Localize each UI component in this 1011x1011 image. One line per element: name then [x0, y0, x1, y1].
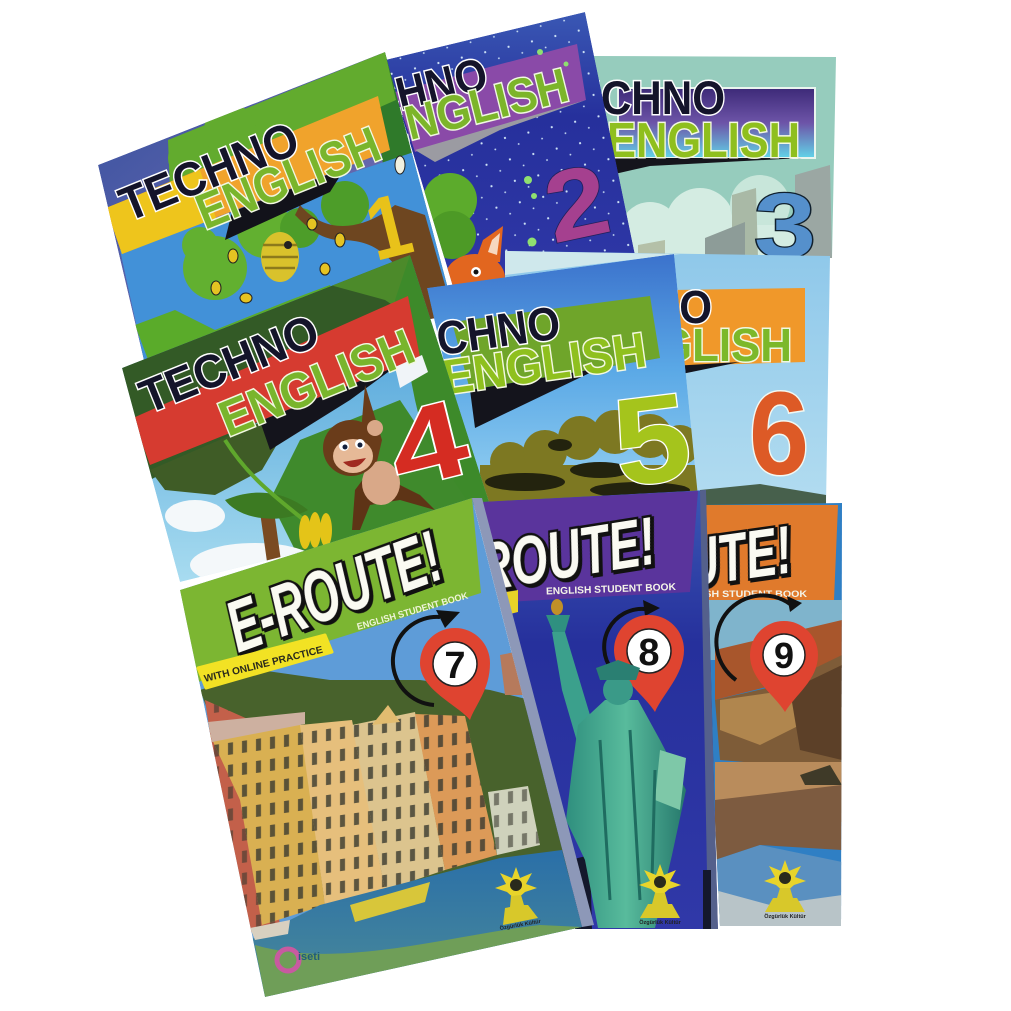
- subtitle: ENGLISH STUDENT BOOK: [356, 591, 469, 633]
- title band: [395, 44, 586, 152]
- right dark foliage and spine: [380, 52, 447, 285]
- book 4: Techno English 4: [122, 255, 490, 587]
- fox: [448, 226, 505, 284]
- title text: TECHNO: [112, 113, 306, 232]
- publisher logo: Özgürlük Kültür: [764, 913, 807, 920]
- title text: E-ROUTE!: [426, 503, 660, 613]
- city skyline: [570, 855, 592, 929]
- book 1: Techno English 1: ENGLISH: [188, 116, 388, 240]
- sky: [700, 600, 842, 660]
- book 6: Techno English 6: [505, 251, 830, 506]
- book 6: Techno English 6: ENGLISH: [597, 319, 792, 371]
- book 2: Techno English 2: [387, 12, 634, 284]
- title band: [705, 505, 838, 600]
- title text: TECHNO: [132, 304, 326, 423]
- coastal buildings: [205, 700, 540, 935]
- statue of liberty: [546, 599, 686, 928]
- route pin 9: [716, 595, 818, 712]
- banana tree: [225, 440, 310, 571]
- book 4: Techno English 4: ENGLISH: [211, 318, 422, 447]
- iseti logo: [277, 949, 320, 971]
- book 2: Techno English 2: ENGLISH: [372, 59, 574, 158]
- surf and sand: [715, 845, 842, 926]
- book 3: Techno English 3: [594, 56, 836, 258]
- title text: TECHNO: [310, 47, 492, 140]
- book 1: Techno English 1: [98, 52, 455, 365]
- spine: [472, 498, 594, 927]
- yellow pill edge: [505, 590, 518, 614]
- tree and trunk: [423, 173, 477, 259]
- title text: TECHNO: [380, 295, 563, 373]
- tree: [182, 181, 455, 320]
- number 2: 2: [535, 143, 619, 265]
- book 7: E-Route 7: [180, 498, 594, 997]
- lower-left foliage: [150, 423, 276, 495]
- number 4: 4: [376, 376, 479, 512]
- clouds and city: [620, 165, 832, 262]
- route pin 7: [393, 610, 490, 720]
- foliage: [168, 52, 396, 190]
- beehive: [261, 232, 299, 282]
- boats: [350, 882, 430, 922]
- title band: [106, 96, 390, 254]
- cliffs: [715, 655, 842, 790]
- subtitle: ENGLISH STUDENT BOOK: [672, 589, 807, 600]
- title text: E-ROUTE!: [568, 512, 796, 617]
- book 5: Techno English 5: [427, 254, 698, 502]
- online practice pill: WITH ONLINE PRACTICE: [203, 645, 324, 685]
- publisher logo: Özgürlük Kültür: [639, 919, 682, 926]
- route pin 8: 8: [638, 632, 660, 674]
- publisher logo: Özgürlük Kültür: [499, 918, 542, 932]
- bees: [211, 156, 405, 303]
- title band: [672, 288, 805, 366]
- title band: [480, 491, 698, 602]
- title band: [452, 296, 660, 390]
- water: [250, 850, 582, 997]
- title band: [180, 498, 481, 682]
- bridge: [715, 620, 842, 700]
- beach: [715, 762, 842, 822]
- dark foliage: [122, 255, 430, 480]
- online practice pill: [198, 635, 332, 688]
- book 9: E-Route 9: [568, 503, 842, 926]
- route pin 8: [604, 600, 684, 712]
- number 5: 5: [606, 367, 698, 513]
- bananas: [299, 512, 332, 549]
- fireflies: [524, 49, 568, 246]
- title band: [618, 88, 815, 158]
- iseti logo: iseti: [298, 951, 320, 963]
- title band: [133, 296, 420, 465]
- book 8: E-Route 8: [426, 490, 718, 929]
- number 1: 1: [356, 173, 421, 280]
- bottom strip: [255, 925, 582, 997]
- lower bush: [136, 285, 330, 358]
- route pin 7: 7: [444, 645, 466, 687]
- publisher logo: [495, 867, 542, 932]
- hillside: [200, 670, 570, 900]
- subtitle: ENGLISH STUDENT BOOK: [546, 582, 677, 598]
- clouds: [165, 500, 305, 577]
- title text: TECHNO: [534, 281, 712, 333]
- title text: E-ROUTE!: [216, 517, 452, 668]
- route pin 9: 9: [774, 635, 794, 676]
- number 3: 3: [754, 175, 816, 277]
- publisher logo: [639, 864, 682, 926]
- monkey: [323, 385, 435, 530]
- book 3: Techno English 3: ENGLISH: [607, 114, 800, 168]
- book 5: Techno English 5: ENGLISH: [439, 323, 650, 405]
- acacia tree: [480, 410, 700, 505]
- publisher logo: [764, 860, 807, 920]
- right leafy strip: [395, 255, 490, 505]
- title text: TECHNO: [547, 71, 725, 124]
- blue sky: [120, 150, 455, 365]
- number 6: 6: [749, 368, 809, 500]
